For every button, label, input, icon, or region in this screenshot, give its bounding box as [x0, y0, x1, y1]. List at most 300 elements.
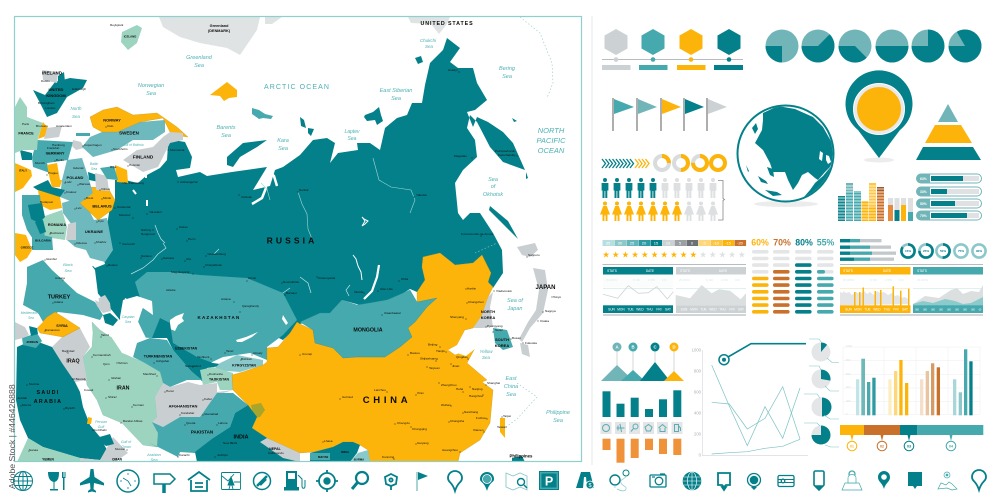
city labels: Warsaw	[79, 182, 91, 186]
stats panel right: 000	[939, 309, 944, 311]
star rating: ★	[670, 250, 678, 260]
country labels: TAJIKISTAN	[209, 378, 230, 382]
city labels: Samarkand	[185, 364, 201, 368]
star rating: ★	[612, 250, 620, 260]
city labels: Yakutsk	[416, 193, 427, 197]
percent rings: 90%	[976, 249, 982, 253]
city labels: Bucharest	[50, 231, 64, 235]
city labels: Al Basrah	[72, 377, 86, 381]
city labels: Rostov	[108, 263, 118, 267]
star rating: ★	[728, 250, 736, 260]
stats panel right: 000	[963, 309, 968, 311]
sea labels: NORTH	[538, 126, 565, 135]
country labels: CHINA	[363, 395, 411, 406]
country labels: RUSSIA	[267, 236, 317, 246]
Syria	[37, 312, 80, 337]
stats panel left: 8,160	[706, 278, 713, 282]
Wrangel and Kuril islands	[415, 56, 528, 239]
stats panel right: 160	[899, 278, 904, 282]
sea labels: East Siberian	[380, 88, 412, 94]
Svalbard	[210, 82, 237, 101]
city labels: Hangzhou	[469, 394, 483, 398]
progress pills: 63%	[920, 177, 927, 181]
city labels: Astana	[221, 297, 231, 301]
city labels: Qom	[103, 362, 110, 366]
city labels: Shiraz	[108, 395, 117, 399]
city labels: Chita	[401, 277, 409, 281]
Eastern India, Bhutan, Burma	[310, 442, 360, 462]
Iran	[83, 322, 163, 447]
sea labels: Barents	[217, 125, 236, 131]
number scale: 25	[630, 241, 635, 246]
city labels: Islamabad	[204, 412, 219, 416]
sea labels: Sea	[91, 167, 97, 171]
city labels: Oslo	[107, 124, 114, 128]
stats panel right: 000	[971, 309, 976, 311]
country labels: INDIA	[341, 450, 350, 454]
star rating: ★	[622, 250, 630, 260]
Hungary	[38, 190, 62, 210]
city labels: Norilsk	[299, 188, 309, 192]
sea labels: Philippine	[546, 410, 570, 416]
pie callouts	[804, 339, 839, 447]
stats panel left: THU	[719, 308, 726, 312]
city labels: Aktobe	[166, 288, 176, 292]
city labels: Paris	[22, 122, 30, 126]
city labels: Fuzhou	[476, 416, 487, 420]
stats panel right: 25,960%	[843, 278, 855, 282]
stats panel right: STATS	[917, 269, 927, 273]
stats panel left: 160	[662, 278, 667, 282]
city labels: Guangzhou	[442, 448, 458, 452]
icon: camera	[650, 474, 666, 487]
country labels: YEMEN	[42, 458, 54, 462]
city labels: Vilnius	[101, 187, 111, 191]
city labels: Copenhagen	[84, 143, 102, 147]
country labels: (DENMARK)	[208, 29, 231, 33]
country labels: SWEDEN	[119, 130, 139, 136]
city labels: Nizhniy	[141, 228, 152, 232]
city labels: Osaka	[540, 319, 549, 323]
city labels: Pyongyang	[487, 324, 503, 328]
legend timeline: 01	[850, 444, 854, 448]
city labels: Lanzhou	[374, 388, 386, 392]
Switzerland	[20, 150, 32, 160]
number scale: 35	[606, 241, 611, 246]
city labels: Murmansk	[170, 148, 185, 152]
Caspian Sea	[112, 296, 153, 357]
UAE and Qatar	[100, 434, 114, 446]
city labels: Harbin	[467, 286, 476, 290]
mountain chart ABCD: C	[653, 345, 657, 350]
city labels: Budapest	[40, 200, 53, 204]
sea labels: Gulf of	[121, 440, 132, 444]
icon: globe	[14, 472, 32, 490]
number scale: 15	[654, 241, 659, 246]
country labels: NEPAL	[269, 447, 282, 451]
country labels: INDIA	[234, 434, 249, 440]
country labels: ARABIA	[34, 399, 62, 405]
sea labels: East	[505, 376, 517, 382]
city labels: Chelyabinsk	[205, 263, 222, 267]
pie row	[766, 29, 982, 63]
city labels: Ulan Ude	[380, 287, 393, 291]
sea labels: Sea	[488, 177, 498, 183]
stats panel left: MON	[617, 308, 625, 312]
city labels: Guiyang	[417, 441, 429, 445]
line chart: 0	[699, 452, 702, 458]
grouped bar chart: 800	[846, 358, 851, 362]
stats panel left: SUN	[608, 308, 616, 312]
panel divider	[591, 16, 593, 465]
star rating: ★	[641, 250, 649, 260]
country labels: NORWAY	[103, 118, 121, 122]
city labels: Dublin	[41, 79, 50, 83]
sea labels: Sea	[278, 146, 288, 152]
icon: star pin	[385, 474, 397, 490]
Balkans dark	[28, 203, 46, 234]
Sweden	[82, 120, 165, 157]
star rating	[602, 250, 746, 260]
city labels: Shenyang	[450, 315, 464, 319]
sea labels: Baltic	[90, 162, 99, 166]
Turkmenistan	[133, 338, 202, 387]
country labels: GERMANY	[46, 152, 65, 156]
number scale: -15	[725, 241, 732, 246]
sea labels: ARCTIC OCEAN	[264, 84, 330, 91]
stats panel left	[602, 264, 746, 315]
Mongolia	[300, 290, 437, 358]
Tajikistan	[200, 367, 233, 390]
stats panel left: 2,650	[721, 278, 728, 282]
Kashmir disputed area	[251, 403, 265, 418]
Kazakhstan	[133, 272, 297, 363]
country labels: NORTH	[481, 309, 495, 314]
line chart: 1000	[692, 348, 702, 352]
icon: folded map search	[506, 473, 527, 490]
city labels: Qaraghandy	[242, 304, 259, 308]
sea labels: PACIFIC	[536, 136, 566, 145]
city labels: Golmud	[342, 395, 353, 399]
stats panel left: FRI	[729, 308, 735, 312]
icon: flag	[417, 472, 428, 491]
sea labels: Sea	[194, 63, 204, 69]
map frame	[14, 16, 582, 462]
country labels: TURKEY	[48, 294, 71, 300]
sea labels: Caspian	[122, 315, 134, 319]
stats panel left: FRI	[656, 308, 662, 312]
icon: compass	[254, 472, 270, 490]
stats panel left: TUE	[627, 308, 634, 312]
city labels: Birmingham	[38, 101, 55, 105]
country labels: BURMA	[354, 458, 364, 462]
city labels: Kharkiv	[96, 240, 107, 244]
city labels: Wuhan	[441, 403, 451, 407]
India	[195, 405, 300, 462]
icon: route pins	[610, 470, 629, 491]
icon: filled globe	[683, 472, 701, 490]
Taiwan	[500, 418, 505, 438]
Mediterranean Sea	[15, 304, 43, 328]
stats panel left: MON	[690, 308, 698, 312]
Oman	[80, 437, 128, 462]
city labels: Tashkent	[197, 355, 210, 359]
city labels: Istanbul	[46, 257, 57, 261]
Scotland north	[58, 72, 65, 84]
China	[232, 253, 493, 462]
Finland	[123, 132, 183, 172]
stats panel left: THU	[646, 308, 653, 312]
country labels: UKRAINE	[85, 229, 103, 234]
stock credit: Adobe Stock | #446426888	[7, 384, 17, 489]
city labels: Shanghai	[487, 381, 500, 385]
city labels: Saratov	[141, 254, 152, 258]
city labels: Kabul	[204, 397, 212, 401]
city labels: New Delhi	[223, 441, 237, 445]
stats panel left: TUE	[700, 308, 707, 312]
chevrons	[602, 159, 649, 168]
city labels: Karachi	[179, 453, 190, 457]
city labels: Krakow	[66, 190, 77, 194]
city labels: Hamburg	[52, 143, 65, 147]
stats panel left: SUN	[681, 308, 688, 312]
percent rings: 75%	[958, 249, 964, 253]
Aleutian and Kuril island chain	[475, 17, 553, 429]
sea labels: Sea	[506, 392, 516, 398]
sea labels: Sea	[28, 316, 34, 320]
progress pills: 70%	[920, 214, 927, 218]
stats panel right: SAT	[902, 308, 908, 312]
city labels: Anadyr	[448, 68, 458, 72]
number scale	[602, 240, 746, 246]
sea labels: Japan	[506, 306, 522, 312]
grouped bar chart: 400	[846, 385, 851, 389]
country labels: BULGARIA	[35, 238, 52, 242]
country labels: IRAN	[117, 386, 130, 392]
stats panel left: 25,960%	[679, 278, 691, 282]
city labels: Tianjin	[436, 349, 445, 353]
country labels: JORDAN	[26, 340, 38, 344]
percent bars: 70%	[773, 238, 791, 248]
star rating: ★	[738, 250, 746, 260]
city labels: Chongqing	[412, 427, 427, 431]
sea labels: Okhotsk	[483, 192, 503, 198]
stats panel left: WED	[636, 308, 644, 312]
country labels	[18, 21, 555, 462]
stats panel left: SAT	[665, 308, 671, 312]
Franz Josef Land	[252, 108, 273, 119]
city labels: Smolensk	[117, 205, 131, 209]
percent rings	[901, 244, 986, 258]
country labels: Philippines	[510, 454, 533, 458]
stats panel left: DATE	[646, 269, 654, 273]
star rating: ★	[699, 250, 707, 260]
city labels: Baghdad	[62, 349, 75, 353]
city labels: Minsk	[103, 196, 112, 200]
icon: card	[778, 476, 794, 486]
city labels: Lahore	[218, 421, 228, 425]
stats panel right: 000	[947, 309, 952, 311]
city labels: Sanaa	[29, 448, 38, 452]
mountain chart ABCD: D	[672, 345, 676, 350]
city labels: Xiamen	[473, 428, 484, 432]
progress pills: 33%	[920, 190, 927, 194]
city labels: Kathmandu	[268, 451, 284, 455]
sea labels: Kara	[277, 138, 289, 144]
city labels: Yekaterinburg	[207, 252, 226, 256]
hexagon timeline	[602, 29, 743, 70]
Poland	[60, 158, 93, 203]
city labels: Taiwan	[497, 425, 507, 429]
Iceland	[121, 25, 142, 50]
Japan	[517, 243, 548, 357]
stats panel right: 000	[931, 309, 936, 311]
sea labels: Gulf of Bothnia	[122, 143, 144, 147]
city labels: Urumqi	[302, 352, 312, 356]
icon: airplane	[80, 469, 104, 492]
progress pills	[916, 174, 982, 220]
orange bar chart	[602, 439, 681, 463]
Baltic states	[115, 165, 128, 183]
Benelux	[38, 122, 48, 139]
sea labels: Mediterranean	[21, 311, 41, 315]
city labels: Muscat	[115, 447, 125, 451]
city labels: Krasnoyarsk	[318, 276, 336, 280]
city labels: Odessa	[76, 241, 87, 245]
city labels: Novgorod	[141, 232, 155, 236]
country labels: KYRGYZSTAN	[232, 364, 256, 368]
number scale: 20	[642, 241, 647, 246]
Yemen	[17, 438, 80, 462]
sea labels: China	[504, 384, 518, 390]
city labels: Taiyuan	[429, 366, 440, 370]
country labels: IRELAND	[42, 70, 63, 76]
Severnaya Zemlya and New Siberian Islands	[300, 107, 383, 136]
mountain chart ABCD: B	[631, 345, 635, 350]
icon: parking: P	[545, 474, 553, 488]
city dots	[21, 72, 552, 459]
stats panel right: FRI	[893, 308, 899, 312]
city labels: Nanjing	[472, 387, 483, 391]
mountain chart ABCD: A	[615, 345, 619, 350]
city labels: Changchun	[468, 300, 484, 304]
city labels: Brest	[86, 196, 93, 200]
sea labels: Arabian	[146, 452, 162, 457]
sea labels: Sea	[125, 320, 131, 324]
city labels: Ulaanbaatar	[384, 311, 401, 315]
city labels: Kyiv	[98, 219, 104, 223]
North Korea	[473, 292, 493, 328]
city labels: Kunming	[382, 455, 394, 459]
star rating: ★	[680, 250, 688, 260]
stats panel right: DATE	[883, 269, 891, 273]
icon: square pin	[718, 473, 730, 490]
small bar gauges	[888, 198, 913, 221]
Caucasus states	[95, 295, 111, 313]
city labels: Moscow	[119, 213, 131, 217]
Ukraine	[62, 197, 113, 262]
country labels: SYRIA	[56, 324, 68, 328]
city labels: Lviv	[76, 206, 82, 210]
Saudi Arabia	[16, 340, 107, 460]
percent rings: 50%	[940, 249, 946, 253]
equalizer chart	[838, 183, 884, 221]
stats panel left: DATE	[719, 269, 727, 273]
number scale: -20	[737, 241, 744, 246]
Germany	[32, 140, 73, 173]
city labels: Bandar Abbas	[123, 419, 143, 423]
icon: parking	[540, 472, 558, 490]
city labels: Damascus	[45, 328, 60, 332]
city labels: Omsk	[248, 276, 257, 280]
Levant and Jordan	[22, 333, 42, 348]
Greenland	[159, 17, 282, 55]
city labels: Beijing	[428, 342, 438, 346]
Uzbekistan	[152, 318, 220, 382]
city labels: Voronezh	[122, 242, 135, 246]
sea labels: Sea	[72, 114, 80, 119]
progress pills: 50%	[920, 202, 927, 206]
France	[15, 97, 43, 153]
stats panel right	[840, 264, 983, 315]
sea labels: Bering	[499, 66, 516, 72]
Bohai and Yellow Sea	[448, 330, 478, 356]
country labels: BELARUS	[92, 204, 112, 208]
city labels: Kerman	[133, 403, 144, 407]
city labels: Isfahan	[111, 376, 121, 380]
stats panel left: 25,960%	[606, 278, 618, 282]
number scale: -5	[702, 241, 707, 246]
line chart: 200	[694, 432, 702, 436]
legend timeline	[840, 425, 983, 451]
city labels: St. Petersburg	[124, 181, 144, 185]
city labels: Magadan	[454, 154, 467, 158]
country labels: ICELAND	[124, 34, 136, 38]
Pakistan	[148, 393, 248, 457]
star rating: ★	[709, 250, 717, 260]
city labels: Bishkek	[241, 357, 252, 361]
stats panel right: THU	[884, 308, 891, 312]
stats panel left: SAT	[738, 308, 744, 312]
Turkey	[23, 260, 103, 322]
sea labels: Persian	[95, 420, 107, 424]
city labels: Tokyo	[553, 295, 561, 299]
country labels: ITALY	[19, 168, 27, 172]
country labels: ROMANIA	[48, 223, 66, 227]
city labels: Vorkuta	[241, 195, 252, 199]
city labels: Vladivostok	[496, 289, 512, 293]
country labels: UZBEKISTAN	[175, 346, 198, 350]
city labels: Novosibirsk	[283, 280, 299, 284]
city labels: Yaroslavl	[149, 210, 162, 214]
city labels: Quetta	[186, 421, 196, 425]
sea labels: Sea	[150, 457, 158, 462]
percent rings: 25%	[923, 249, 929, 253]
country labels: TURKMENISTAN	[144, 354, 173, 358]
country labels: UNITED	[49, 87, 64, 92]
city labels: Xi'an	[417, 391, 424, 395]
grouped bar chart: 200	[846, 399, 851, 403]
Romania	[42, 210, 67, 240]
Nepal	[260, 438, 300, 462]
city labels: Ankara	[55, 276, 65, 280]
city labels: Nanchang	[464, 410, 478, 414]
panel: map	[14, 16, 582, 462]
stats panel right: 25,960%	[917, 278, 929, 282]
city labels: Mecca	[22, 403, 31, 407]
stats panel left: STATS	[607, 269, 617, 273]
number scale: 5	[679, 241, 682, 246]
